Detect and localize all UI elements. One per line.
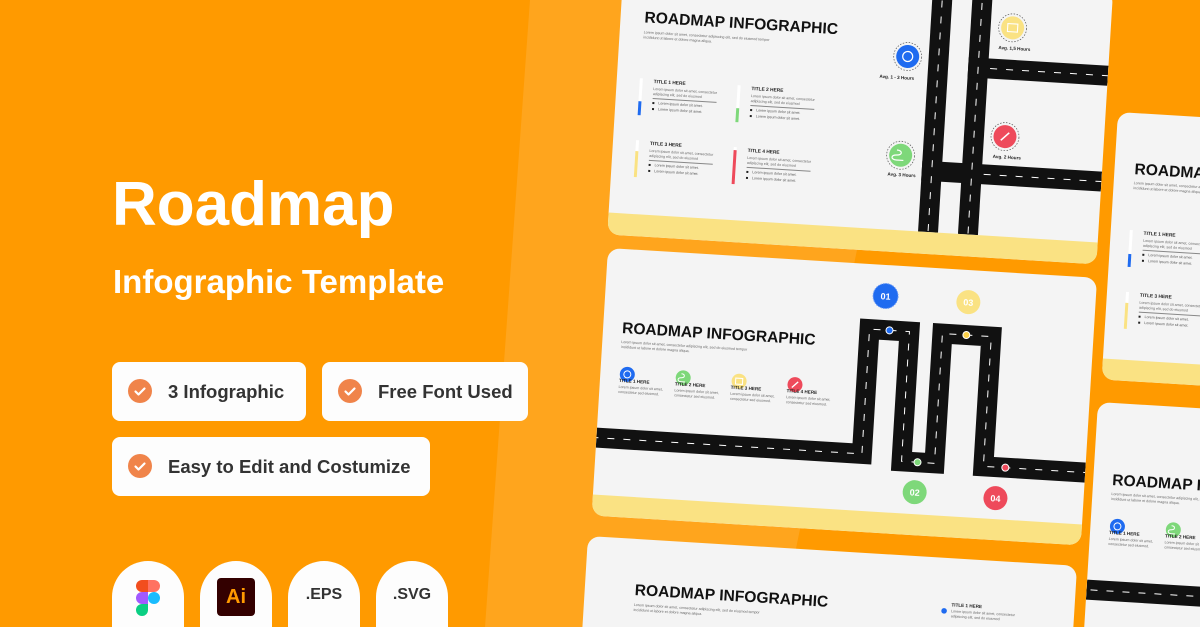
card subtitle: incididunt ut labore et dolore magna aliqua. bbox=[633, 608, 702, 616]
block: title 2: Lorem ipsum dolor sit amet, consectetur bbox=[751, 94, 815, 102]
block: title 3: Lorem ipsum dolor sit amet. bbox=[654, 169, 699, 176]
icon: SVG: .SVG bbox=[393, 586, 431, 603]
card subtitle: incididunt ut labore et dolore magna aliqua. bbox=[1111, 497, 1180, 505]
item 2: Lorem ipsum dolor sit amet, bbox=[674, 388, 719, 395]
block: title 1: adipiscing elit, sed do eiusmod bbox=[653, 92, 702, 99]
item 2: consectetur sed eiusmod. bbox=[674, 393, 715, 399]
icon: blue brain bbox=[893, 42, 922, 71]
block: title 4: Lorem ipsum dolor sit amet, consectetur bbox=[747, 156, 811, 164]
item 2: TITLE 2 HERE bbox=[675, 381, 706, 388]
icon: EPS: .EPS bbox=[306, 586, 342, 603]
item 4: consectetur sed eiusmod. bbox=[786, 400, 827, 406]
block: title 3 bbox=[634, 140, 714, 178]
card subtitle: incididunt ut labore et dolore magna aliqua. bbox=[643, 35, 712, 44]
icon: yellow image bbox=[998, 14, 1027, 42]
card subtitle: incididunt ut labore et dolore magna aliqua. bbox=[621, 345, 690, 353]
icon: figma bbox=[112, 561, 184, 627]
block: title 3: TITLE 3 HERE bbox=[1140, 294, 1172, 301]
panel: right card A bbox=[1102, 112, 1200, 409]
item 3: consectetur sed eiusmod. bbox=[730, 396, 771, 403]
chip: Easy to Edit: Easy to Edit and Costumize bbox=[168, 456, 411, 477]
item 3 bbox=[730, 374, 775, 403]
block: title 1: Lorem ipsum dolor sit amet. bbox=[658, 107, 702, 114]
panel: card 3 (bottom) bbox=[576, 536, 1077, 627]
label: Avg 2 Hours: Avg. 2 Hours bbox=[993, 154, 1021, 161]
block: title 2: TITLE 2 HERE bbox=[751, 87, 783, 94]
item 2: TITLE 2 HERE bbox=[1165, 533, 1196, 540]
block: title 4: adipiscing elit, sed do eiusmod bbox=[747, 160, 796, 167]
block: title 1 bbox=[638, 78, 717, 116]
block: title 1: Lorem ipsum dolor sit amet. bbox=[658, 101, 703, 108]
badge 01: 01 bbox=[880, 291, 891, 302]
subtitle: Infographic Template bbox=[113, 263, 444, 300]
block: title 1: TITLE 1 HERE bbox=[1143, 232, 1176, 239]
item 1: consectetur sed eiusmod. bbox=[1108, 541, 1149, 548]
item 4: TITLE 4 HERE bbox=[786, 388, 817, 395]
item 1: consectetur sed eiusmod. bbox=[618, 389, 659, 396]
chip: Easy to Edit bbox=[112, 437, 430, 496]
block: title 1: Lorem ipsum dolor sit amet. bbox=[1148, 259, 1192, 266]
item: title 1: Lorem ipsum dolor sit amet, consectetur bbox=[951, 609, 1015, 617]
item 4 bbox=[786, 377, 831, 406]
item 3: TITLE 3 HERE bbox=[731, 385, 761, 392]
panel: card 1 (crossroads roadmap) bbox=[607, 0, 1113, 264]
item 2 bbox=[1164, 522, 1200, 551]
icon: green route bbox=[886, 140, 915, 170]
icon: check bbox=[338, 379, 362, 403]
item 4: Lorem ipsum dolor sit amet, bbox=[786, 395, 831, 402]
icon: check bbox=[128, 454, 152, 478]
icon: illustrator bbox=[200, 561, 272, 627]
milestone dots bbox=[878, 327, 1017, 471]
badge 04: 04 bbox=[990, 493, 1001, 504]
block: title 4 bbox=[732, 147, 811, 184]
block: title 4: Lorem ipsum dolor sit amet. bbox=[752, 176, 796, 183]
block: title 1 bbox=[1128, 230, 1200, 267]
block: title 3: adipiscing elit, sed do eiusmod bbox=[649, 153, 698, 160]
item: title 1 bbox=[941, 602, 1015, 621]
block: title 1: adipiscing elit, sed do eiusmod bbox=[1143, 243, 1192, 250]
chip: Free Font Used: Free Font Used bbox=[378, 381, 513, 402]
roads: crossroads map bbox=[918, 0, 1108, 235]
icon: illustrator: Ai bbox=[226, 586, 246, 608]
block: title 3 bbox=[1124, 292, 1200, 329]
chip: 3 Infographic bbox=[112, 362, 306, 421]
card subtitle: Lorem ipsum dolor sit amet, consectetur adipiscing elit, sed do eiusmod tempor bbox=[634, 603, 760, 615]
label: Avg 1-3 Hours: Avg. 1 - 3 Hours bbox=[879, 74, 914, 81]
card title: ROADMAP INFOGRAPHIC bbox=[644, 9, 839, 38]
icon: SVG bbox=[376, 561, 448, 627]
block: title 4: Lorem ipsum dolor sit amet. bbox=[752, 170, 797, 177]
item: title 1: adipiscing elit, sed do eiusmod bbox=[951, 614, 1000, 621]
panel: card 2 (winding road roadmap) bbox=[592, 248, 1097, 545]
item 1 bbox=[1108, 518, 1153, 548]
item 1: Lorem ipsum dolor sit amet, bbox=[618, 385, 663, 392]
card title: ROADMAP INFOGRAPHIC bbox=[622, 320, 816, 349]
badge 02 bbox=[902, 480, 927, 504]
block: title 3: Lorem ipsum dolor sit amet. bbox=[654, 163, 699, 170]
block: title 3: Lorem ipsum dolor sit amet, consectetur bbox=[649, 149, 713, 157]
block: title 3: Lorem ipsum dolor sit amet. bbox=[1144, 321, 1189, 328]
main title: Roadmap bbox=[112, 170, 394, 239]
card subtitle: Lorem ipsum dolor sit amet, consectetur adipiscing elit, sed do eiusmod tempor bbox=[644, 30, 770, 42]
item 1: TITLE 1 HERE bbox=[1109, 530, 1140, 537]
block: title 2: adipiscing elit, sed do eiusmod bbox=[751, 99, 800, 106]
badge 02: 02 bbox=[909, 487, 920, 498]
badge 04 bbox=[983, 486, 1008, 510]
badge 01 bbox=[872, 283, 899, 309]
block: title 3: adipiscing elit, sed do eiusmod bbox=[1139, 305, 1188, 312]
item: title 1: TITLE 1 HERE bbox=[951, 602, 982, 609]
item 3: Lorem ipsum dolor sit amet, bbox=[730, 392, 775, 398]
block: title 1: Lorem ipsum dolor sit amet. bbox=[1148, 253, 1193, 260]
block: title 1: TITLE 1 HERE bbox=[653, 80, 686, 87]
card subtitle: Lorem ipsum dolor sit amet, consectetur adipiscing elit, sed do eiusmod tempor bbox=[621, 340, 747, 352]
icon: red brush bbox=[990, 122, 1020, 151]
chip: Free Font Used bbox=[322, 362, 528, 421]
block: title 3: Lorem ipsum dolor sit amet. bbox=[1144, 315, 1189, 322]
icon: EPS bbox=[288, 561, 360, 627]
badge 03 bbox=[956, 290, 980, 314]
block: title 4: TITLE 4 HERE bbox=[747, 149, 780, 156]
winding road bbox=[596, 318, 1086, 483]
block: title 2: Lorem ipsum dolor sit amet. bbox=[756, 108, 801, 115]
block: title 3: TITLE 3 HERE bbox=[650, 142, 682, 149]
badge 03: 03 bbox=[963, 297, 974, 308]
panel: right card B bbox=[1082, 402, 1200, 627]
block: title 2: Lorem ipsum dolor sit amet. bbox=[756, 114, 800, 121]
icon: check bbox=[128, 379, 152, 403]
block: title 2 bbox=[735, 86, 815, 122]
block: title 1: Lorem ipsum dolor sit amet, consectetur bbox=[653, 87, 717, 95]
item 1: Lorem ipsum dolor sit amet, bbox=[1109, 537, 1153, 544]
item 1 bbox=[618, 366, 663, 396]
label: Avg 3 Hours: Avg. 3 Hours bbox=[887, 171, 916, 178]
card title: ROADMAP INFOGRAPHIC bbox=[634, 582, 829, 611]
road bbox=[1086, 580, 1200, 607]
chip: 3 Infographic: 3 Infographic bbox=[168, 381, 284, 402]
label: Avg 1,5 Hours: Avg. 1,5 Hours bbox=[998, 45, 1031, 52]
item 2 bbox=[674, 370, 719, 399]
item 1: TITLE 1 HERE bbox=[619, 378, 650, 385]
